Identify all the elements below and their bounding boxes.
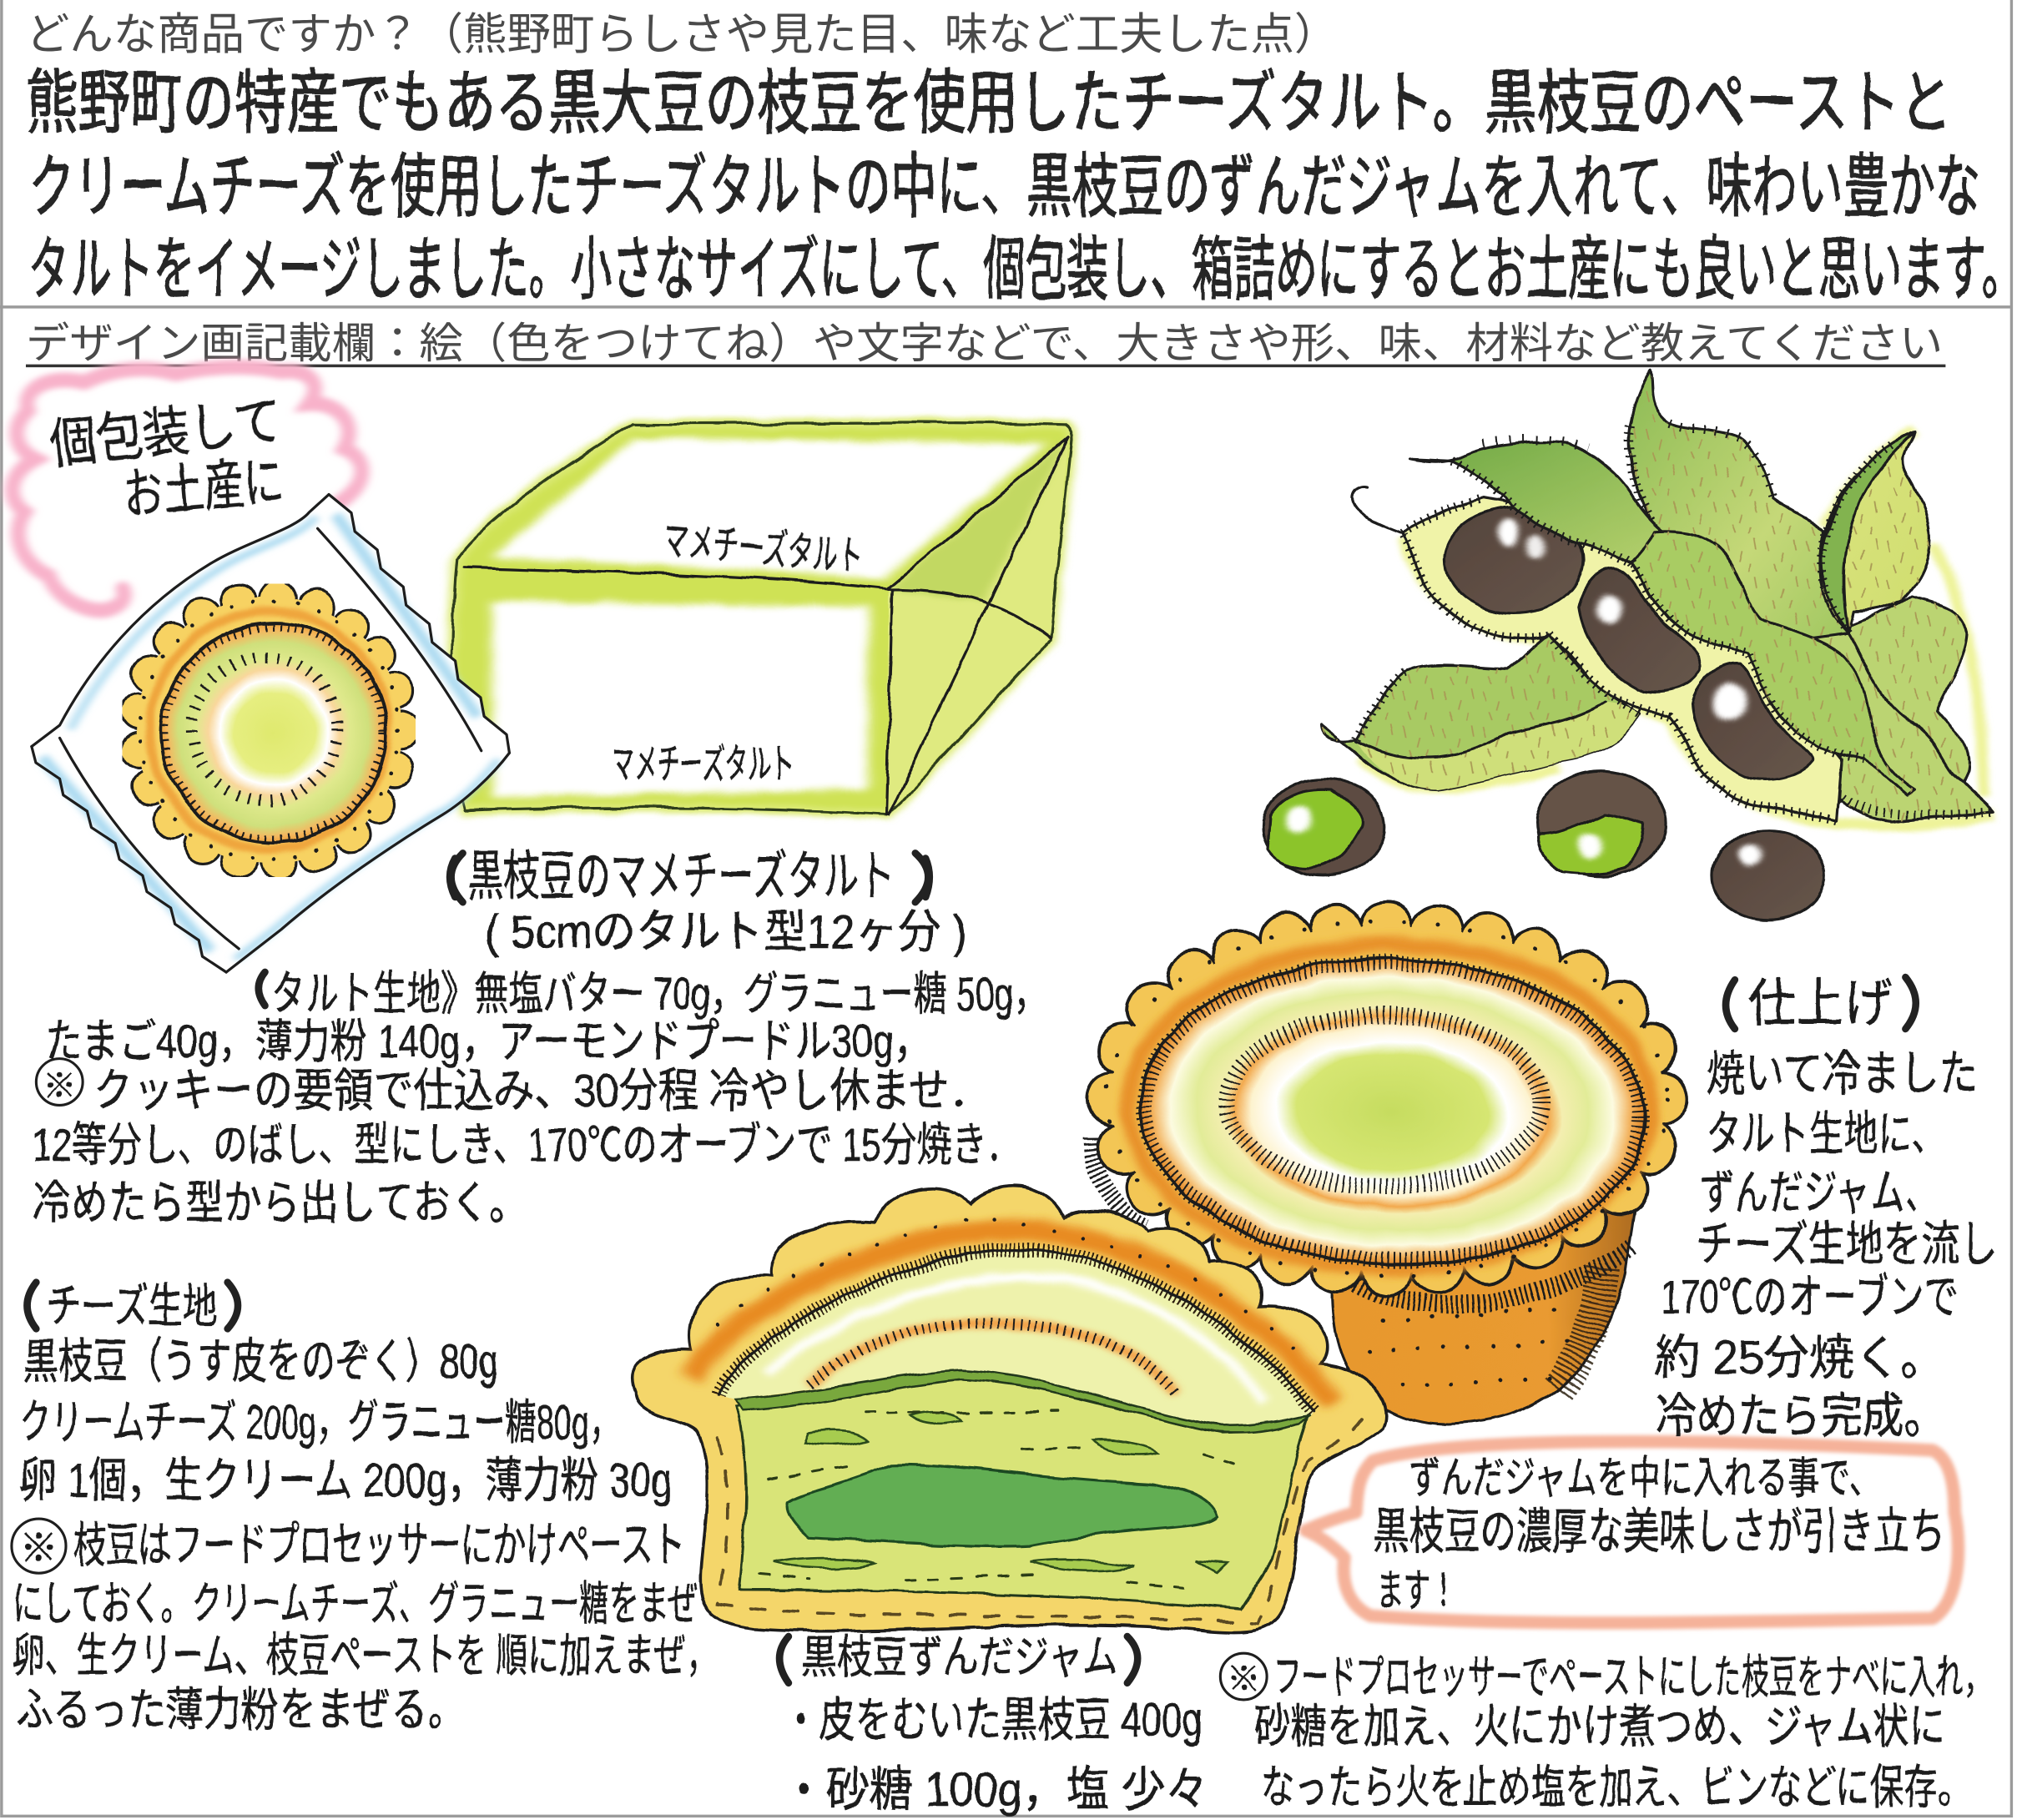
tart dough bracket left	[259, 972, 265, 1006]
left bracket	[450, 853, 463, 902]
bean in pod 2	[1579, 568, 1701, 693]
finishing line 3: ずんだジャム、	[1700, 1166, 1939, 1219]
box front label: マメチーズタルト	[612, 741, 794, 788]
jam right bracket	[1127, 1636, 1137, 1683]
filling top surface	[719, 1249, 1314, 1428]
finishing right bracket	[1905, 977, 1916, 1029]
callout outline	[1306, 1442, 1959, 1623]
bean in pod 1	[1445, 507, 1584, 613]
illustration: individually wrapped tart	[32, 495, 509, 972]
finishing left bracket	[1726, 980, 1735, 1029]
jam ingredient 2: ・砂糖 100g，塩 少々	[782, 1763, 1208, 1817]
orange baked band	[691, 1230, 1334, 1404]
cut face	[736, 1374, 1307, 1609]
callout: why the jam goes inside	[1306, 1442, 1959, 1623]
batch size note: ( 5cmのタルト型12ヶ分 )	[485, 905, 967, 957]
wrapper film	[32, 495, 509, 972]
product name: 黒枝豆のマメチーズタルト	[468, 845, 895, 906]
wrapped tart top	[162, 623, 386, 843]
cheese dough line 3: 卵 1個，生クリーム 200g，薄力粉 30g	[19, 1454, 673, 1508]
cloud text line 2: お土産に	[120, 451, 287, 525]
cheese dough line 6: 卵、生クリーム、枝豆ペーストを 順に加えまぜ，	[13, 1630, 718, 1681]
pink cloud callout	[13, 367, 362, 611]
heading underline	[26, 365, 1945, 366]
inner arc ticks	[809, 1323, 1175, 1394]
back right pod	[1746, 514, 1993, 822]
finishing heading	[1726, 976, 1916, 1033]
box shape	[452, 423, 1071, 814]
jam heading	[779, 1632, 1137, 1683]
right bracket	[915, 853, 930, 902]
note symbol: ※	[43, 1067, 76, 1105]
jam ingredient 1: ・皮をむいた黒枝豆 400g	[782, 1693, 1203, 1747]
tart filled top	[1135, 950, 1650, 1273]
cheese dough right bracket	[228, 1283, 238, 1328]
product description text	[26, 63, 2023, 309]
callout line 3: ます！	[1377, 1566, 1457, 1616]
note mark	[12, 1519, 66, 1573]
lower left pod	[1321, 633, 1639, 790]
cheese dough line 5: にしておく。クリームチーズ、グラニュー糖をまぜ	[13, 1578, 698, 1630]
finishing steps block	[1655, 976, 1997, 1443]
crust wall dashes	[719, 1419, 1362, 1624]
finishing line 6: 約 25分焼く。	[1655, 1332, 1945, 1385]
cheese dough line 2: クリームチーズ 200g，グラニュー糖80g，	[19, 1396, 621, 1449]
cloud outline	[13, 367, 362, 611]
printed question heading: どんな商品ですか？（熊野町らしさや見た目、味など工夫した点）	[26, 10, 1338, 59]
tart dough line 3: クッキーの要領で仕込み、30分程 冷やし休ませ．	[93, 1065, 989, 1117]
outer arc line	[719, 1249, 1314, 1411]
yellow halo	[1362, 431, 1993, 824]
top centre pod	[1628, 371, 1849, 648]
zunda jam layer	[787, 1465, 1217, 1546]
wrapped tart scalloped edge	[136, 597, 402, 864]
tart scalloped rim	[1107, 921, 1667, 1276]
jam method block	[1220, 1651, 1991, 1813]
bean in pod 3	[1692, 663, 1814, 780]
tart dough line 4: 12等分し、のばし、型にしき、170℃のオーブンで 15分焼き．	[33, 1119, 1021, 1171]
loose bean half peeled centre	[1537, 771, 1666, 875]
cheese dough line 1: 黒枝豆（うす皮をのぞく）80g	[23, 1335, 497, 1389]
note symbol: ※	[19, 1526, 58, 1570]
note mark	[1220, 1653, 1267, 1700]
jam left bracket	[779, 1636, 789, 1683]
finishing title: 仕上げ	[1747, 976, 1893, 1033]
cloud text line 1: 個包装して	[47, 390, 285, 475]
right top pod	[1820, 432, 1930, 633]
tart dough recipe block	[33, 968, 1047, 1229]
upper left pod	[1409, 440, 1665, 564]
jam title: 黒枝豆ずんだジャム	[801, 1632, 1118, 1682]
zunda jam recipe block	[779, 1632, 1208, 1817]
open pod interior	[1351, 487, 1842, 820]
loose bean half peeled left	[1263, 779, 1384, 875]
tart dough line 1: タルト生地》無塩バター 70g，グラニュー糖 50g，	[271, 968, 1047, 1020]
tart dough line 2: たまご40g，薄力粉 140g，アーモンドプードル30g，	[45, 1016, 930, 1067]
outer dark ticks arc	[719, 1249, 1314, 1411]
green top strip	[736, 1370, 1310, 1433]
tart dough line 5: 冷めたら型から出しておく。	[33, 1177, 527, 1229]
white highlight arc	[767, 1276, 1265, 1404]
middle seamed pod	[1631, 531, 1963, 795]
loose whole bean	[1711, 831, 1825, 920]
printed drawing-area heading: デザイン画記載欄：絵（色をつけてね）や文字などで、大きさや形、味、材料など教えてください	[26, 320, 1943, 367]
illustration: whole baked tart	[1092, 921, 1667, 1424]
tart crust	[633, 1186, 1386, 1632]
finishing line 7: 冷めたら完成。	[1655, 1389, 1945, 1443]
crust dots	[719, 1218, 1293, 1349]
cheese dough line 7: ふるった薄力粉をまぜる。	[16, 1684, 466, 1736]
cheese dough line 4: 枝豆はフードプロセッサーにかけペースト	[73, 1519, 685, 1572]
orange inner arc	[809, 1323, 1175, 1394]
illustration: cross-section of tart	[633, 1186, 1386, 1632]
tart side wall	[1092, 1137, 1641, 1424]
cheese dough left bracket	[28, 1283, 36, 1328]
cheese dough title: チーズ生地	[47, 1281, 217, 1333]
product name heading	[450, 845, 930, 906]
cheese dough recipe block	[12, 1281, 718, 1736]
cheese dough heading	[28, 1281, 238, 1333]
green patches in cheese layer	[774, 1412, 1227, 1572]
illustration: black edamame pods and beans	[1263, 371, 1993, 920]
cheese layer dashes	[760, 1411, 1244, 1590]
note symbol: ※	[1227, 1661, 1260, 1698]
note mark	[36, 1059, 83, 1105]
box lid label: マメチーズタルト	[662, 517, 865, 580]
illustration: gift box	[452, 423, 1071, 814]
